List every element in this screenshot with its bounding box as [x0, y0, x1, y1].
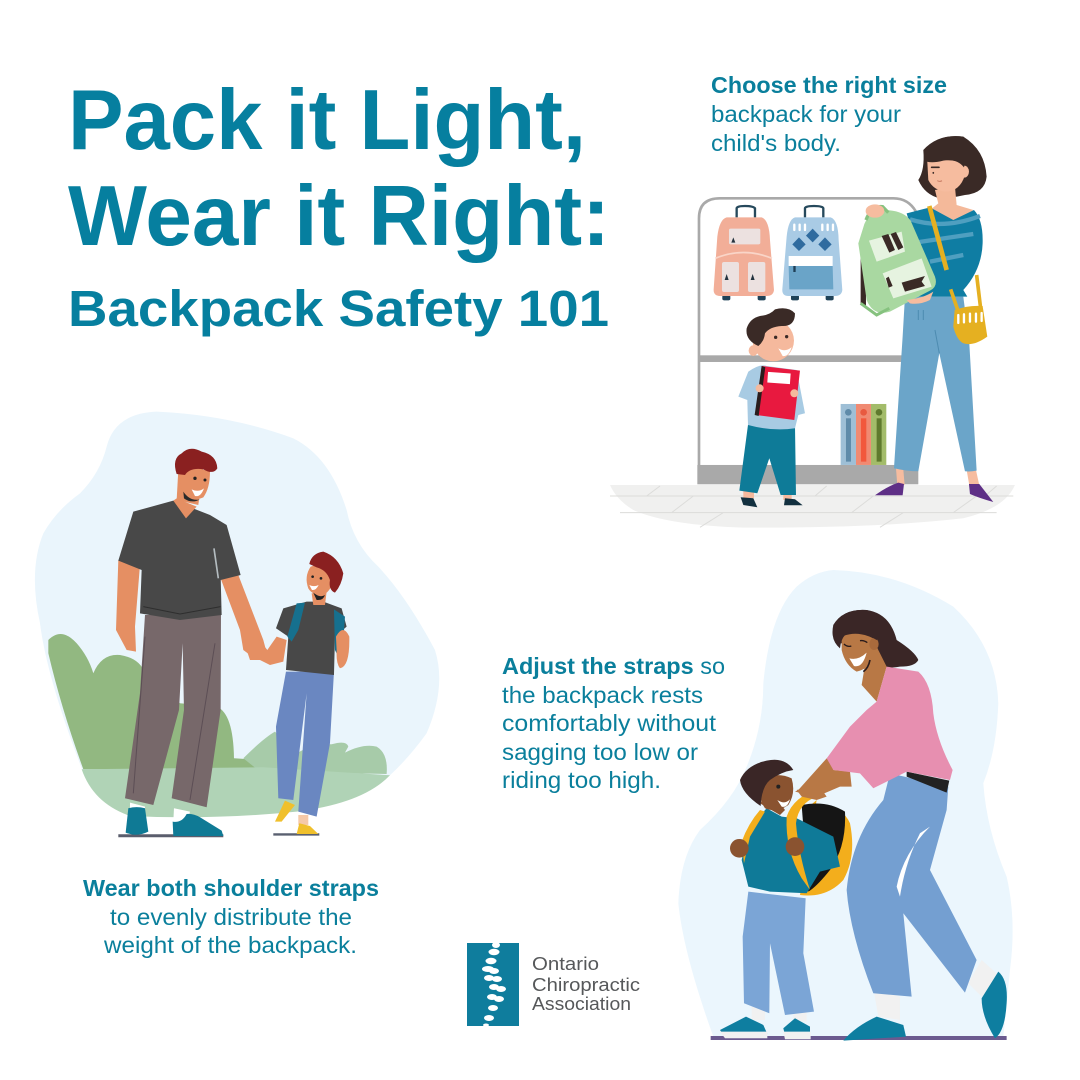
logo wordmark: Ontario: [532, 954, 599, 974]
text block: adjust the straps: sagging too low or: [502, 739, 698, 765]
text block: adjust the straps: riding too high.: [502, 767, 661, 793]
boy: [243, 552, 349, 836]
floor: [610, 485, 1015, 528]
title: Backpack Safety 101: [68, 280, 609, 337]
background blob: [35, 412, 439, 810]
child: [720, 760, 852, 1039]
ground: [82, 767, 390, 817]
mother: [795, 610, 1007, 1041]
text block: adjust the straps: the backpack rests: [502, 682, 703, 708]
backpack: blue: [782, 206, 842, 300]
hair back: [833, 610, 918, 667]
logo wordmark: Chiropractic: [532, 975, 640, 995]
illustration: father and son holding hands in a park: [35, 412, 439, 837]
background blob: [678, 570, 1013, 1037]
text block: choose the right size: [711, 72, 947, 156]
title: Wear it Right:: [68, 169, 610, 264]
text block: wear both shoulder straps: weight of the backpack.: [103, 932, 357, 958]
text block: wear both shoulder straps: Wear both shoulder straps: [83, 875, 379, 901]
title: Pack it Light,: [68, 73, 586, 168]
logo wordmark: [532, 954, 640, 1014]
man: [116, 449, 267, 837]
text block: wear both shoulder straps: [83, 875, 379, 958]
backpack: peach: [714, 206, 774, 300]
woman: [858, 136, 993, 502]
green backpack: [858, 210, 936, 313]
title: [68, 73, 610, 337]
text block: choose the right size: child's body.: [711, 130, 841, 156]
illustration: parent and child choosing a backpack: [610, 136, 1015, 528]
bushes: [48, 634, 262, 769]
text block: adjust the straps: comfortably without: [502, 710, 717, 736]
binders on shelf: [841, 404, 886, 465]
logo: Ontario Chiropractic Association: [467, 942, 640, 1026]
text block: choose the right size: backpack for your: [711, 101, 901, 127]
logo wordmark: Association: [532, 994, 631, 1014]
text block: choose the right size: Choose the right size: [711, 72, 947, 98]
text block: wear both shoulder straps: to evenly distribute the: [110, 904, 352, 930]
boy with red book: [738, 308, 805, 507]
ground shadow: [711, 1036, 1007, 1040]
text block: adjust the straps: Adjust the straps so: [502, 653, 725, 679]
hair back: [918, 136, 987, 198]
illustration: mother adjusting child's backpack straps: [678, 570, 1013, 1041]
text block: adjust the straps: [502, 653, 725, 793]
logo mark: spine: [467, 942, 519, 1026]
clothing rack: [697, 198, 918, 484]
